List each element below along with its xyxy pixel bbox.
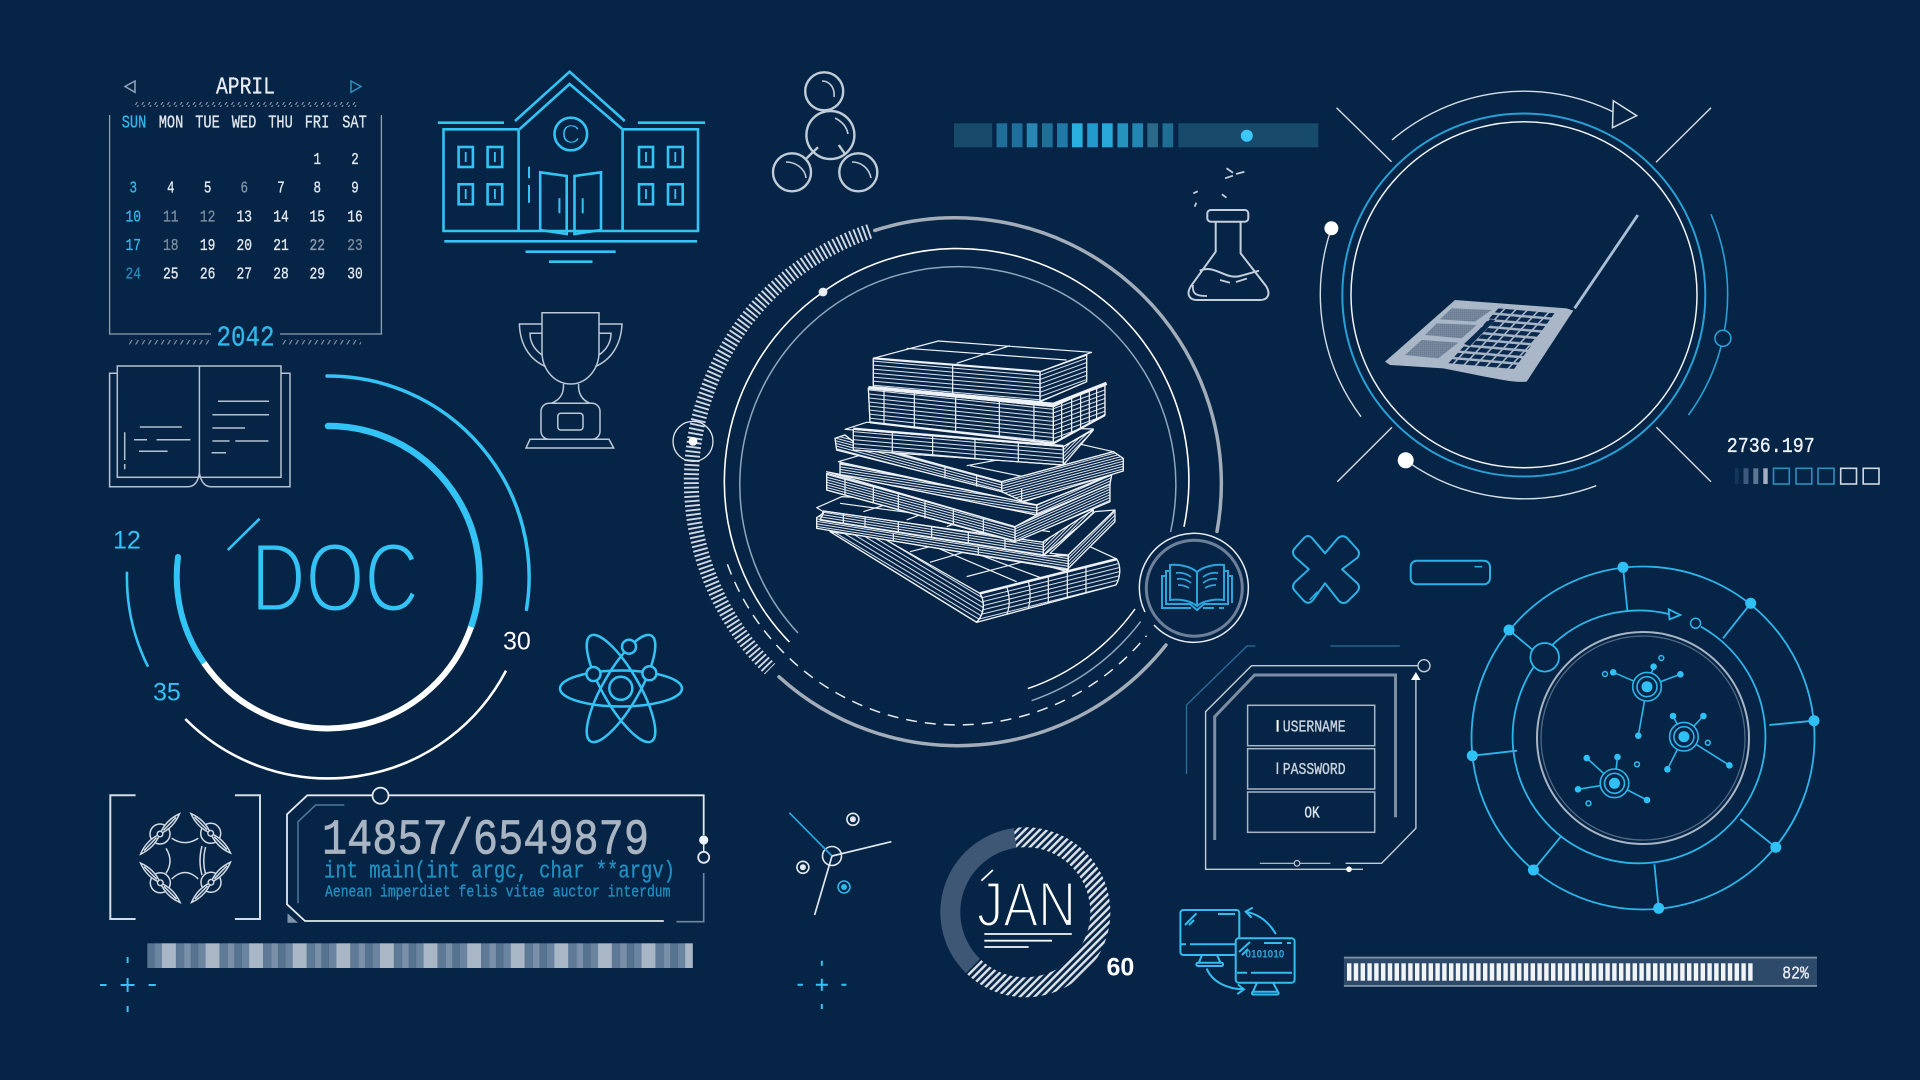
panel: calendar (110, 74, 381, 354)
top book (873, 341, 1092, 402)
fifth book (838, 453, 1112, 515)
weekday headers: THU (268, 112, 293, 133)
password field: PASSWORD (1283, 761, 1346, 780)
gauge value labels: 12 (113, 526, 141, 554)
icon: close X (1293, 536, 1359, 603)
network cluster 3 (1575, 754, 1650, 806)
calendar dates: 13 (237, 208, 252, 227)
calendar dates: 27 (237, 266, 252, 285)
network cluster 2 (1664, 713, 1733, 773)
network outer nodes (1467, 562, 1820, 914)
concentric rings (691, 218, 1221, 746)
panel: network circle (1467, 562, 1820, 914)
weekday headers: SAT (342, 112, 367, 133)
calendar dates: 10 (126, 208, 141, 227)
calendar dates: 19 (200, 237, 215, 256)
ok button: OK (1304, 804, 1320, 823)
login frame (1186, 646, 1430, 872)
laptop rings and ticks (1320, 91, 1731, 499)
second book (868, 383, 1107, 443)
bottom book (830, 532, 1120, 622)
icon: crosshair center (798, 961, 846, 1009)
calendar dates: 3 (130, 180, 137, 199)
calendar dates: 21 (273, 237, 289, 256)
JAN underlines (981, 870, 1072, 947)
calendar dates: 15 (310, 208, 325, 227)
weekday headers (122, 112, 367, 133)
calendar dates: 23 (347, 237, 363, 256)
book medallion (1139, 533, 1248, 642)
calendar dates: 12 (200, 208, 215, 227)
calendar dates: 20 (237, 237, 252, 256)
laptop readout value: 2736.197 (1727, 436, 1815, 459)
book stack wireframe (817, 341, 1123, 622)
gauge value labels (113, 526, 531, 707)
calendar dates: 4 (167, 180, 175, 199)
icon: school building (438, 72, 705, 262)
progress bar (1344, 957, 1817, 987)
readout frame (287, 788, 709, 923)
username field: USERNAME (1283, 719, 1346, 738)
readout number: 14857/6549879 (322, 812, 649, 869)
gauge value labels: 30 (503, 627, 531, 655)
calendar dates: 11 (163, 208, 179, 227)
panel: code readout (287, 788, 709, 923)
weekday headers: TUE (195, 112, 220, 133)
calendar dates: 6 (241, 180, 248, 199)
panel: laptop ring (1320, 91, 1879, 499)
calendar dates: 14 (273, 208, 289, 227)
panel: login form (1186, 646, 1430, 872)
calendar dates: 5 (204, 180, 211, 199)
calendar month header (125, 74, 361, 107)
calendar dates: 26 (200, 266, 215, 285)
seventh book (817, 497, 1115, 570)
username field (1248, 705, 1375, 746)
gauge value labels: 35 (153, 679, 181, 707)
icon: drone in brackets (110, 795, 260, 919)
calendar frame (110, 115, 381, 334)
icon: school building: C (561, 119, 580, 149)
calendar year: 2042 (216, 321, 274, 354)
calendar dates: 17 (126, 237, 141, 256)
icon: small book (1162, 565, 1232, 610)
readout caption: Aenean imperdiet felis vitae auctor interdum (325, 883, 671, 902)
icon: two monitors (1180, 908, 1295, 994)
calendar dates: 2 (351, 151, 359, 170)
ok button (1248, 792, 1375, 832)
icon: two monitors: 0101010 (1246, 948, 1284, 960)
calendar dates: 9 (351, 180, 359, 199)
level squares (1735, 468, 1879, 484)
icon: molecule (773, 72, 877, 191)
icon: swirl connector (789, 813, 891, 915)
calendar dates: 16 (347, 208, 363, 227)
readout code line: int main(int argc, char **argv) (324, 858, 675, 885)
sixth book (827, 472, 1110, 542)
calendar month header: APRIL (216, 74, 275, 101)
network cluster 1 (1603, 656, 1684, 739)
fourth book (835, 435, 1123, 502)
calendar dates: 30 (347, 266, 363, 285)
calendar dates (126, 151, 363, 285)
calendar dates: 8 (314, 180, 321, 199)
weekday headers: SUN (122, 112, 146, 133)
ring dot (819, 288, 827, 296)
calendar dates: 29 (310, 266, 325, 285)
calendar dates: 22 (310, 237, 325, 256)
calendar year (129, 321, 361, 354)
chart: JAN ring (950, 837, 1134, 987)
gauge title: DOC (251, 523, 419, 632)
calendar dates: 1 (314, 151, 321, 170)
calendar dates: 24 (126, 266, 141, 285)
password field (1248, 749, 1375, 789)
JAN ring arcs (950, 837, 1100, 987)
calendar dates: 28 (273, 266, 289, 285)
panel: central books circle (673, 218, 1248, 746)
weekday headers: FRI (305, 112, 329, 133)
left node (673, 421, 713, 461)
icon: atom (560, 627, 682, 750)
slider bar (954, 123, 1318, 147)
icon: flask (1189, 168, 1268, 300)
chart: DOC radial gauge (113, 376, 531, 778)
weekday headers: MON (159, 112, 183, 133)
JAN title: JAN (977, 870, 1076, 940)
icon: trophy (519, 313, 622, 448)
laptop image (1385, 215, 1638, 382)
gauge arcs (127, 376, 529, 778)
icon: minus button (1411, 561, 1490, 584)
calendar dates: 25 (163, 266, 179, 285)
icon: open book (110, 366, 290, 487)
calendar dates: 7 (277, 180, 285, 199)
network rings (1472, 566, 1814, 910)
barcode strip (147, 943, 693, 968)
JAN value: 60 (1106, 954, 1134, 982)
third book (845, 422, 1093, 465)
progress bar: 82% (1782, 964, 1809, 984)
weekday headers: WED (232, 112, 256, 133)
icon: crosshair left (100, 957, 156, 1012)
calendar dates: 18 (163, 237, 179, 256)
